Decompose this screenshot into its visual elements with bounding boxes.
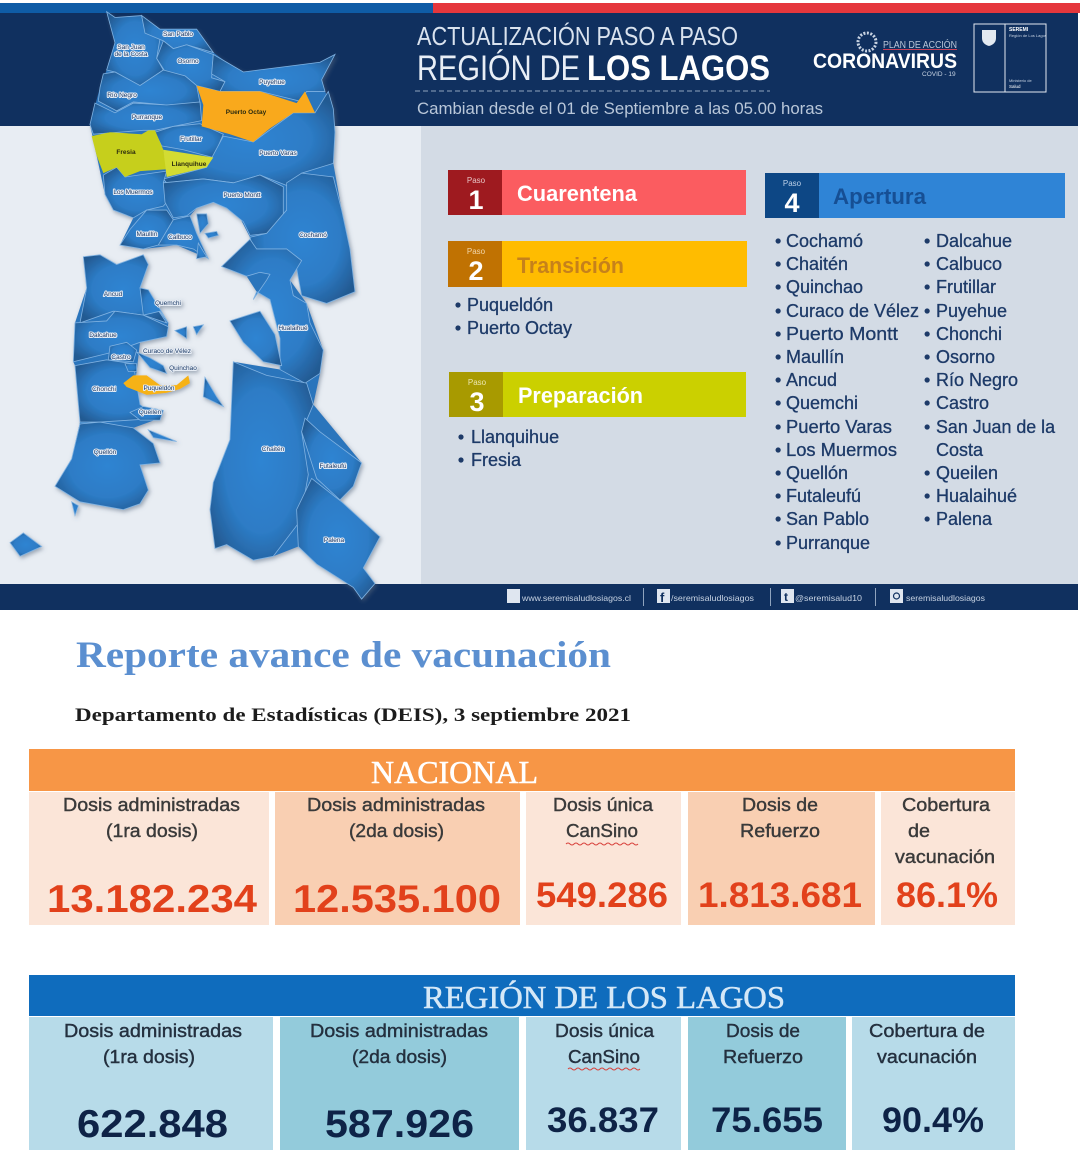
card: dosis única región: Dosis única [555, 1021, 655, 1041]
panel: paso 4 apertura: Paso [783, 179, 802, 188]
map place labels: Puqueldón [143, 385, 175, 392]
list: comunas paso 4 columna 1: Ancud [786, 370, 837, 390]
list: comunas paso 4 columna 1: • [775, 347, 781, 367]
list: comunas paso 4 columna 1: • [775, 509, 781, 529]
subheading: fuente DEIS: Departamento de Estadísticas (DEIS), 3 septiembre 2021 [75, 705, 631, 726]
list: comunas paso 4 columna 1: • [775, 324, 781, 344]
logo: Plan de Acción Coronavirus: CORONAVIRUS [813, 50, 957, 73]
map place labels: Puerto Montt [223, 192, 261, 199]
list: comunas paso 4 columna 2: • [924, 254, 930, 274]
card: dosis única nacional: 549.286 [536, 876, 668, 915]
footer band [0, 584, 1078, 610]
panel: paso 3 preparación: 3 [469, 387, 485, 417]
list: comunas paso 4 columna 1: • [775, 254, 781, 274]
list: comunas paso 4 columna 2: Río Negro [936, 370, 1018, 390]
list: comunas paso 4 columna 2: Costa [936, 440, 984, 460]
card: refuerzo región: Refuerzo [723, 1047, 803, 1067]
map place labels [89, 31, 347, 544]
list: comunas paso 4 columna 1: • [775, 417, 781, 437]
map: Los Lagos region communes [10, 12, 380, 599]
list: comunas paso 4 columna 1: Puerto Varas [786, 417, 892, 437]
map place labels: Puerto Octay [226, 109, 267, 116]
region: Puerto Octay (orange) [197, 86, 315, 142]
panel: paso 1 cuarentena: 1 [468, 185, 484, 215]
map place labels: Purranque [132, 114, 163, 121]
card: 2da dosis nacional [275, 792, 520, 925]
list: comunas paso 4 columna 2: • [924, 486, 930, 506]
logo: Seremi de Salud [974, 24, 1047, 92]
list: comunas paso 4 columna 1: • [775, 393, 781, 413]
card: cobertura región: 90.4% [882, 1101, 984, 1140]
card: dosis única región: 36.837 [547, 1101, 659, 1140]
map place labels: Chonchi [92, 386, 116, 393]
list: comunas paso 4 columna 2: Queilen [936, 463, 998, 483]
card: refuerzo nacional: Refuerzo [740, 821, 820, 841]
list: comunas paso 4 columna 1: Puerto Montt [786, 324, 898, 344]
map place labels: Queilen [139, 409, 162, 416]
footer social links: seremisaludlosiagos [906, 593, 985, 603]
card: dosis única nacional: CanSino [566, 821, 638, 841]
list: comunas paso 4 columna 1: • [775, 231, 781, 251]
map place labels: Osorno [177, 58, 199, 65]
map place labels: Frutillar [180, 136, 203, 143]
card: 1ra dosis región: (1ra dosis) [103, 1047, 195, 1067]
panel: paso 3 preparación: Paso [468, 378, 487, 387]
footer social links: f [660, 590, 665, 605]
list: comunas paso 4 columna 2: Castro [936, 393, 989, 413]
list: comunas paso 4 columna 1: • [775, 370, 781, 390]
card: dosis única nacional: Dosis única [553, 795, 654, 815]
footer social links [507, 588, 985, 606]
list: comunas paso 4 columna 2: Chonchi [936, 324, 1002, 344]
map place labels: Futaleufú [319, 463, 347, 470]
card: refuerzo nacional: 1.813.681 [698, 876, 862, 915]
list: comunas paso 4 columna 2: San Juan de la [936, 417, 1056, 437]
list: comunas paso 2 [455, 295, 572, 338]
header band [0, 13, 1078, 126]
card: 1ra dosis nacional: Dosis administradas [63, 795, 240, 815]
map place labels: Calbuco [168, 234, 192, 241]
top flag strip [0, 3, 1080, 13]
list: comunas paso 2: Puerto Octay [467, 318, 572, 338]
card: cobertura nacional: 86.1% [896, 876, 998, 915]
region: Fresia (yellow-green) [92, 130, 167, 177]
footer social links: www.seremisaludlosiagos.cl [521, 593, 631, 603]
map place labels: Puerto Varas [259, 150, 297, 157]
card: 2da dosis región: (2da dosis) [352, 1047, 447, 1067]
footer social links: /seremisaludlosiagos [671, 593, 754, 603]
map place labels: Palena [324, 537, 344, 544]
list: comunas paso 3: Fresia [471, 450, 522, 470]
list: comunas paso 4 columna 2: • [924, 509, 930, 529]
map place labels: Río Negro [107, 92, 137, 99]
card: 1ra dosis región: Dosis administradas [64, 1021, 242, 1041]
card: refuerzo nacional: Dosis de [742, 795, 818, 815]
list: comunas paso 4 columna 2: Palena [936, 509, 993, 529]
list: comunas paso 4 columna 1: Los Muermos [786, 440, 897, 460]
card: cobertura nacional [881, 792, 1015, 925]
map place labels: de la Costa [115, 51, 148, 58]
header title [417, 21, 770, 88]
map place labels: Quellón [94, 449, 117, 456]
footer social links: @seremisalud10 [795, 593, 862, 603]
list: comunas paso 4 columna 2: Frutillar [936, 277, 996, 297]
panel: paso 4 apertura [765, 173, 1065, 218]
list: comunas paso 4 columna 1: Cochamó [786, 231, 863, 251]
header divider [415, 90, 770, 92]
list: comunas paso 4 columna 1: • [775, 440, 781, 460]
map place labels: Castro [111, 354, 131, 361]
panel: paso 2 transición: 2 [468, 256, 484, 286]
region: Puqueldón (orange) [123, 375, 190, 395]
panel: paso 1 cuarentena: Paso [467, 176, 486, 185]
list: comunas paso 4 columna 2: • [924, 463, 930, 483]
list: comunas paso 4 columna 1: • [775, 301, 781, 321]
nacional header: NACIONAL [371, 754, 538, 790]
logo: Seremi de Salud: SEREMI [1009, 27, 1029, 33]
list: comunas paso 2: Puqueldón [467, 295, 553, 315]
list: comunas paso 4 columna 2: • [924, 277, 930, 297]
card: refuerzo región: 75.655 [711, 1101, 823, 1140]
logo: Seremi de Salud: Región de Los Lagos [1009, 33, 1047, 38]
list: comunas paso 4 columna 1: Quinchao [786, 277, 863, 297]
panel: paso 4 apertura: 4 [784, 188, 800, 218]
map place labels: Hualaihué [278, 325, 308, 332]
card: 1ra dosis nacional [29, 792, 269, 925]
card: cobertura región: Cobertura de [869, 1021, 985, 1041]
card: dosis única región [526, 1017, 681, 1150]
list: comunas paso 4 columna 2: • [924, 370, 930, 390]
list: comunas paso 4 columna 2: • [924, 324, 930, 344]
list: comunas paso 4 columna 1: San Pablo [786, 509, 869, 529]
list: comunas paso 4 columna 1: • [775, 463, 781, 483]
map place labels: Los Muermos [113, 189, 153, 196]
map place labels: Maullín [137, 231, 158, 238]
card: 2da dosis nacional: 12.535.100 [293, 878, 501, 921]
list: comunas paso 4 columna 2: Dalcahue [936, 231, 1012, 251]
list: comunas paso 4 columna 2: • [924, 393, 930, 413]
list: comunas paso 4 columna 1: Chaitén [786, 254, 848, 274]
panel: paso 3 preparación: Preparación [518, 383, 643, 408]
logo: Seremi de Salud: Salud [1009, 84, 1021, 89]
card: cobertura región [852, 1017, 1015, 1150]
map place labels: Dalcahue [89, 332, 117, 339]
content background panel [421, 126, 1078, 584]
panel: nacional [29, 749, 1015, 925]
list: comunas paso 4 columna 1: Curaco de Vélez [786, 301, 919, 321]
nacional header [29, 749, 1015, 791]
header title: REGIÓN DE [417, 49, 580, 88]
footer social links: t [784, 590, 788, 604]
card: refuerzo región: Dosis de [726, 1021, 800, 1041]
map place labels: Llanquihue [172, 161, 207, 168]
card: 2da dosis nacional: (2da dosis) [349, 821, 444, 841]
list: comunas paso 4 columna 1: Futaleufú [786, 486, 861, 506]
logo: Plan de Acción Coronavirus [813, 33, 957, 78]
list: comunas paso 4 columna 1: Purranque [786, 533, 870, 553]
logo: Plan de Acción Coronavirus: COVID - 19 [922, 71, 956, 78]
map place labels: Cochamó [299, 232, 327, 239]
panel: paso 1 cuarentena: Cuarentena [517, 181, 638, 206]
card: 1ra dosis región [29, 1017, 273, 1150]
list: comunas paso 3 [458, 427, 559, 470]
list: comunas paso 4 columna 1: Quellón [786, 463, 848, 483]
list: comunas paso 4 columna 1: Quemchi [786, 393, 858, 413]
panel: paso 2 transición: Transición [517, 253, 624, 278]
map background panel [0, 126, 421, 584]
map place labels: Curaco de Vélez [143, 348, 191, 355]
map place labels: Chaitén [262, 446, 285, 453]
header title: LOS LAGOS [587, 49, 770, 88]
logo: Seremi de Salud: Ministerio de [1009, 78, 1032, 83]
list: comunas paso 4 columna 1: • [775, 486, 781, 506]
list: comunas paso 4 columna 1: • [775, 533, 781, 553]
list: comunas paso 4 columna 1 [775, 231, 919, 553]
map place labels: Ancud [104, 291, 123, 298]
list: comunas paso 4 columna 2 [924, 231, 1056, 529]
card: cobertura nacional: de [908, 821, 930, 841]
región header [29, 975, 1015, 1016]
header subtitle: Cambian desde el 01 de Septiembre a las 05.00 horas [417, 99, 823, 118]
heading: reporte avance de vacunación: Reporte avance de vacunación [76, 635, 611, 676]
región header: REGIÓN DE LOS LAGOS [423, 979, 785, 1015]
list: comunas paso 4 columna 2: • [924, 347, 930, 367]
card: cobertura nacional: vacunación [895, 847, 995, 867]
panel: paso 1 cuarentena [448, 170, 746, 215]
map place labels: San Juan [117, 44, 145, 51]
panel: paso 3 preparación [449, 372, 746, 417]
map place labels: Quinchao [169, 365, 197, 372]
logo: Plan de Acción Coronavirus: PLAN DE ACCIÓN [883, 38, 957, 51]
list: comunas paso 4 columna 2: • [924, 231, 930, 251]
panel: paso 2 transición: Paso [467, 247, 486, 256]
list: comunas paso 4 columna 2: Calbuco [936, 254, 1002, 274]
card: 1ra dosis región: 622.848 [77, 1103, 228, 1146]
list: comunas paso 4 columna 1: Maullín [786, 347, 844, 367]
map place labels: San Pablo [163, 31, 193, 38]
list: comunas paso 4 columna 2: • [924, 417, 930, 437]
map place labels: Fresia [116, 149, 136, 156]
card: 2da dosis región: Dosis administradas [310, 1021, 488, 1041]
card: dosis única nacional [526, 792, 681, 925]
card: 1ra dosis nacional: (1ra dosis) [106, 821, 198, 841]
list: comunas paso 4 columna 1: • [775, 277, 781, 297]
list: comunas paso 4 columna 2: Hualaihué [936, 486, 1017, 506]
card: dosis única región: CanSino [568, 1047, 640, 1067]
list: comunas paso 4 columna 2: • [924, 301, 930, 321]
list: comunas paso 4 columna 2: Osorno [936, 347, 995, 367]
map place labels: Quemchi [155, 300, 181, 307]
card: 2da dosis nacional: Dosis administradas [307, 795, 485, 815]
list: comunas paso 3: Llanquihue [471, 427, 559, 447]
card: cobertura región: vacunación [877, 1047, 977, 1067]
card: cobertura nacional: Cobertura [902, 795, 991, 815]
map silhouette underlay [55, 12, 380, 599]
panel: región de los lagos [29, 975, 1015, 1150]
list: comunas paso 4 columna 2: Puyehue [936, 301, 1007, 321]
card: 1ra dosis nacional: 13.182.234 [47, 878, 257, 921]
panel: paso 2 transición [448, 241, 747, 287]
card: refuerzo nacional [688, 792, 875, 925]
panel: paso 4 apertura: Apertura [833, 184, 927, 209]
region: Llanquihue (yellow-green) [163, 150, 213, 177]
map place labels: Puyehue [259, 79, 285, 86]
card: refuerzo región [688, 1017, 846, 1150]
card: 2da dosis región: 587.926 [325, 1103, 474, 1146]
card: 2da dosis región [280, 1017, 519, 1150]
header title: ACTUALIZACIÓN PASO A PASO [417, 21, 738, 51]
